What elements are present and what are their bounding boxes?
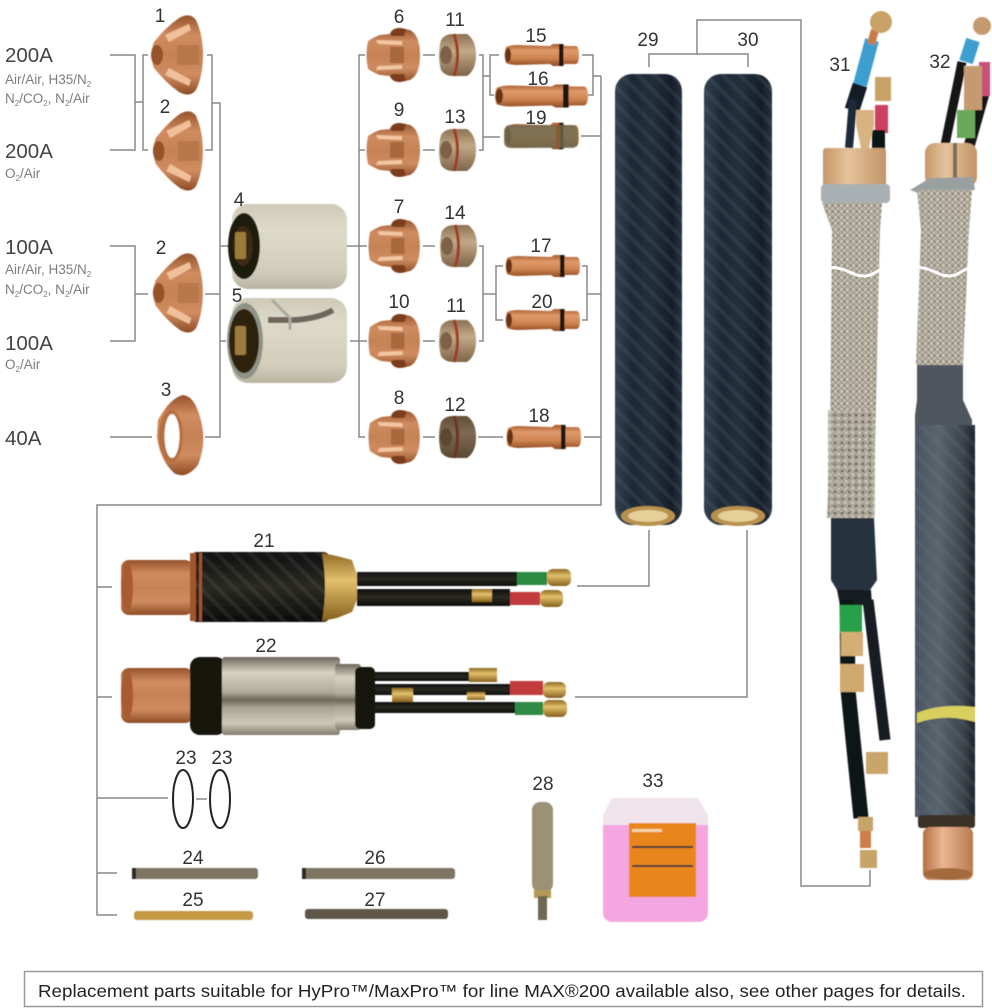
part numbers: 23: [211, 748, 233, 769]
amperage labels: 2: [16, 174, 21, 183]
amperage labels: Air/Air, H35/N: [5, 262, 87, 277]
part numbers: 5: [232, 286, 242, 307]
cartridge tube 29: [615, 74, 682, 526]
part numbers: 20: [531, 292, 553, 313]
torch head 22: [121, 657, 567, 735]
part numbers: 21: [253, 531, 275, 552]
part numbers: 6: [394, 7, 404, 28]
part numbers: 14: [444, 203, 466, 224]
tool 28: [532, 802, 553, 920]
amperage labels: /Air: [69, 91, 90, 106]
part numbers: 28: [532, 774, 554, 795]
part numbers: 30: [737, 30, 759, 51]
amperage labels: O: [5, 357, 16, 372]
amperage labels: 100A: [5, 236, 53, 259]
part numbers: 24: [182, 848, 204, 869]
part numbers: 23: [175, 748, 197, 769]
torch body 4: [228, 204, 347, 289]
part numbers: 22: [255, 636, 277, 657]
amperage labels: /CO: [19, 282, 43, 297]
part numbers: 4: [234, 190, 245, 211]
connector lines: [97, 20, 870, 915]
part numbers: 19: [525, 108, 547, 129]
part numbers: 2: [156, 238, 166, 259]
part numbers: 8: [394, 388, 404, 409]
amperage labels: 2: [15, 99, 20, 108]
amperage labels: /Air: [20, 357, 41, 372]
part numbers: 16: [527, 69, 549, 90]
part numbers: 29: [637, 30, 659, 51]
torch body 5: [227, 298, 347, 383]
electrodes 15-20: [495, 44, 588, 449]
hose assembly 32: [910, 17, 991, 880]
part numbers: 11: [446, 296, 466, 317]
part numbers: 10: [388, 292, 410, 313]
amperage labels: O: [5, 166, 16, 181]
amperage labels: /Air: [69, 282, 90, 297]
amperage labels: Air/Air, H35/N: [5, 72, 87, 87]
part numbers: 9: [394, 100, 404, 121]
amperage labels: N: [5, 282, 15, 297]
part numbers: [155, 6, 951, 911]
wavy break marks: [826, 268, 970, 276]
amperage labels: 2: [15, 290, 20, 299]
amperage labels: 2: [16, 365, 21, 374]
amperage labels: 2: [65, 99, 70, 108]
part numbers: 31: [829, 55, 851, 76]
o-rings 23: [173, 770, 230, 828]
amperage labels: 200A: [5, 44, 53, 67]
shields 1, 2, 2, 3: [151, 15, 203, 475]
torch head 21: [121, 552, 571, 622]
part numbers: 11: [445, 10, 465, 31]
amperage labels: , N: [48, 282, 65, 297]
part numbers: 1: [155, 6, 165, 27]
footer note: [24, 972, 982, 1006]
amperage labels: 200A: [5, 140, 53, 163]
part numbers: 27: [364, 890, 386, 911]
amperage labels: 2: [87, 80, 92, 89]
part numbers: 3: [161, 380, 171, 401]
amperage labels: 2: [43, 290, 48, 299]
part numbers: 18: [528, 406, 550, 427]
part numbers: 33: [642, 771, 664, 792]
amperage labels: [5, 44, 92, 450]
amperage labels: 100A: [5, 332, 53, 355]
amperage labels: , N: [48, 91, 65, 106]
part numbers: 7: [394, 197, 404, 218]
amperage labels: 2: [43, 99, 48, 108]
part numbers: 15: [525, 26, 547, 47]
swirl rings 11, 13, 14, 11, 12: [439, 34, 477, 458]
coolant jug 33: [603, 798, 708, 922]
retaining caps 6, 9, 7, 10, 8: [366, 28, 420, 464]
part numbers: 2: [160, 97, 170, 118]
part numbers: 13: [444, 107, 466, 128]
amperage labels: N: [5, 91, 15, 106]
part numbers: 17: [530, 236, 552, 257]
part numbers: 26: [364, 848, 386, 869]
part numbers: 12: [444, 395, 466, 416]
cartridge tube 30: [704, 74, 772, 526]
hose assembly 31: [821, 11, 892, 868]
amperage labels: /Air: [20, 166, 41, 181]
amperage labels: 2: [87, 270, 92, 279]
part numbers: 25: [182, 890, 204, 911]
footer note: Replacement parts suitable for HyPro™/MaxPro™ for line MAX®200 available also, see other pages for details.: [38, 981, 966, 1001]
amperage labels: 2: [65, 290, 70, 299]
part numbers: 32: [929, 52, 951, 73]
amperage labels: /CO: [19, 91, 43, 106]
amperage labels: 40A: [5, 427, 42, 450]
tubes 24-27: [132, 868, 455, 920]
